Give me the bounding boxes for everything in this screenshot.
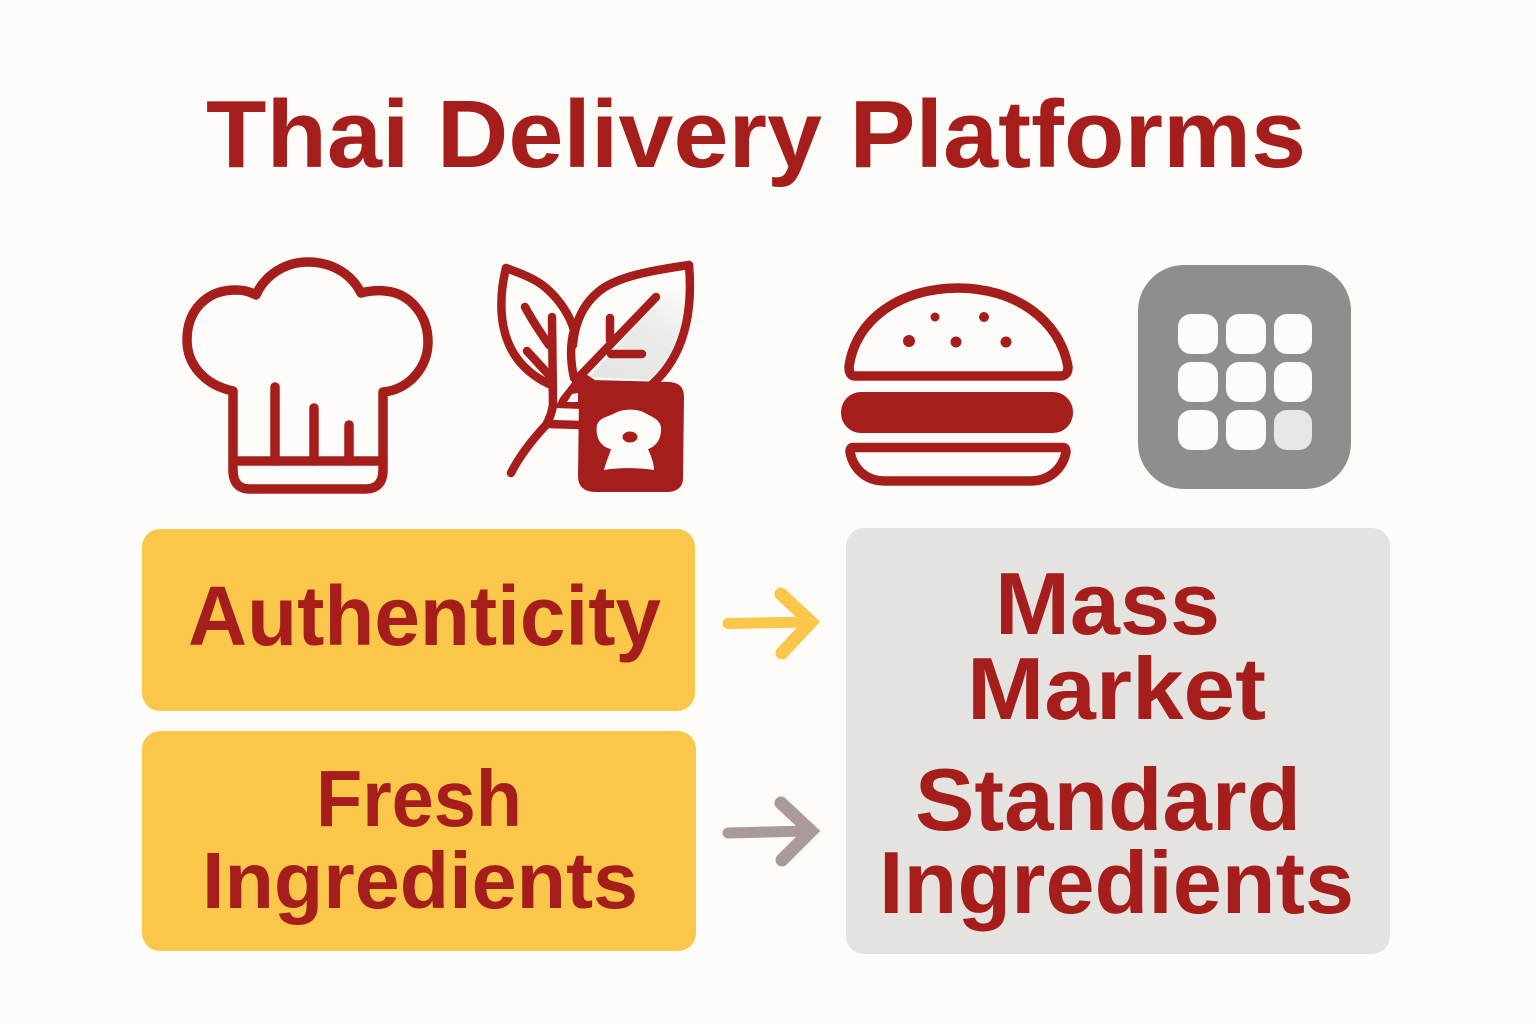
title: Thai Delivery Platforms (206, 81, 1306, 188)
stem cutout (567, 393, 578, 402)
icon: burger (841, 288, 1073, 481)
arrow: fresh to standard ingredients (728, 803, 811, 860)
burger sesame seeds (903, 312, 1012, 348)
badge chef hat (597, 410, 661, 470)
panel: fresh ingredients (142, 731, 696, 951)
panel: authenticity: Authenticity (188, 569, 661, 663)
panel: mass market and standard ingredients: Mass (995, 554, 1220, 653)
panel: mass market and standard ingredients: Market (967, 639, 1266, 738)
badge chef hat dot (622, 432, 638, 442)
burger patty (841, 392, 1073, 433)
burger bottom bun (850, 448, 1066, 481)
panel: fresh ingredients: Fresh (316, 754, 522, 843)
badge square (578, 380, 684, 492)
panel: authenticity (142, 529, 695, 711)
icon: herb leaves with chef badge (501, 265, 690, 492)
icon: chef hat (187, 262, 428, 489)
burger top bun (849, 288, 1068, 376)
arrow: authenticity to mass market (728, 594, 811, 653)
icon: app grid (1138, 265, 1351, 489)
leaf outlines and stems (501, 265, 690, 473)
panel: mass market and standard ingredients: Ingredients (879, 833, 1354, 932)
stem wedge (555, 371, 595, 409)
panel: mass market and standard ingredients (846, 528, 1390, 954)
panel: mass market and standard ingredients: Standard (915, 750, 1301, 849)
leaf shading (589, 278, 685, 380)
panel: fresh ingredients: Ingredients (202, 836, 638, 925)
